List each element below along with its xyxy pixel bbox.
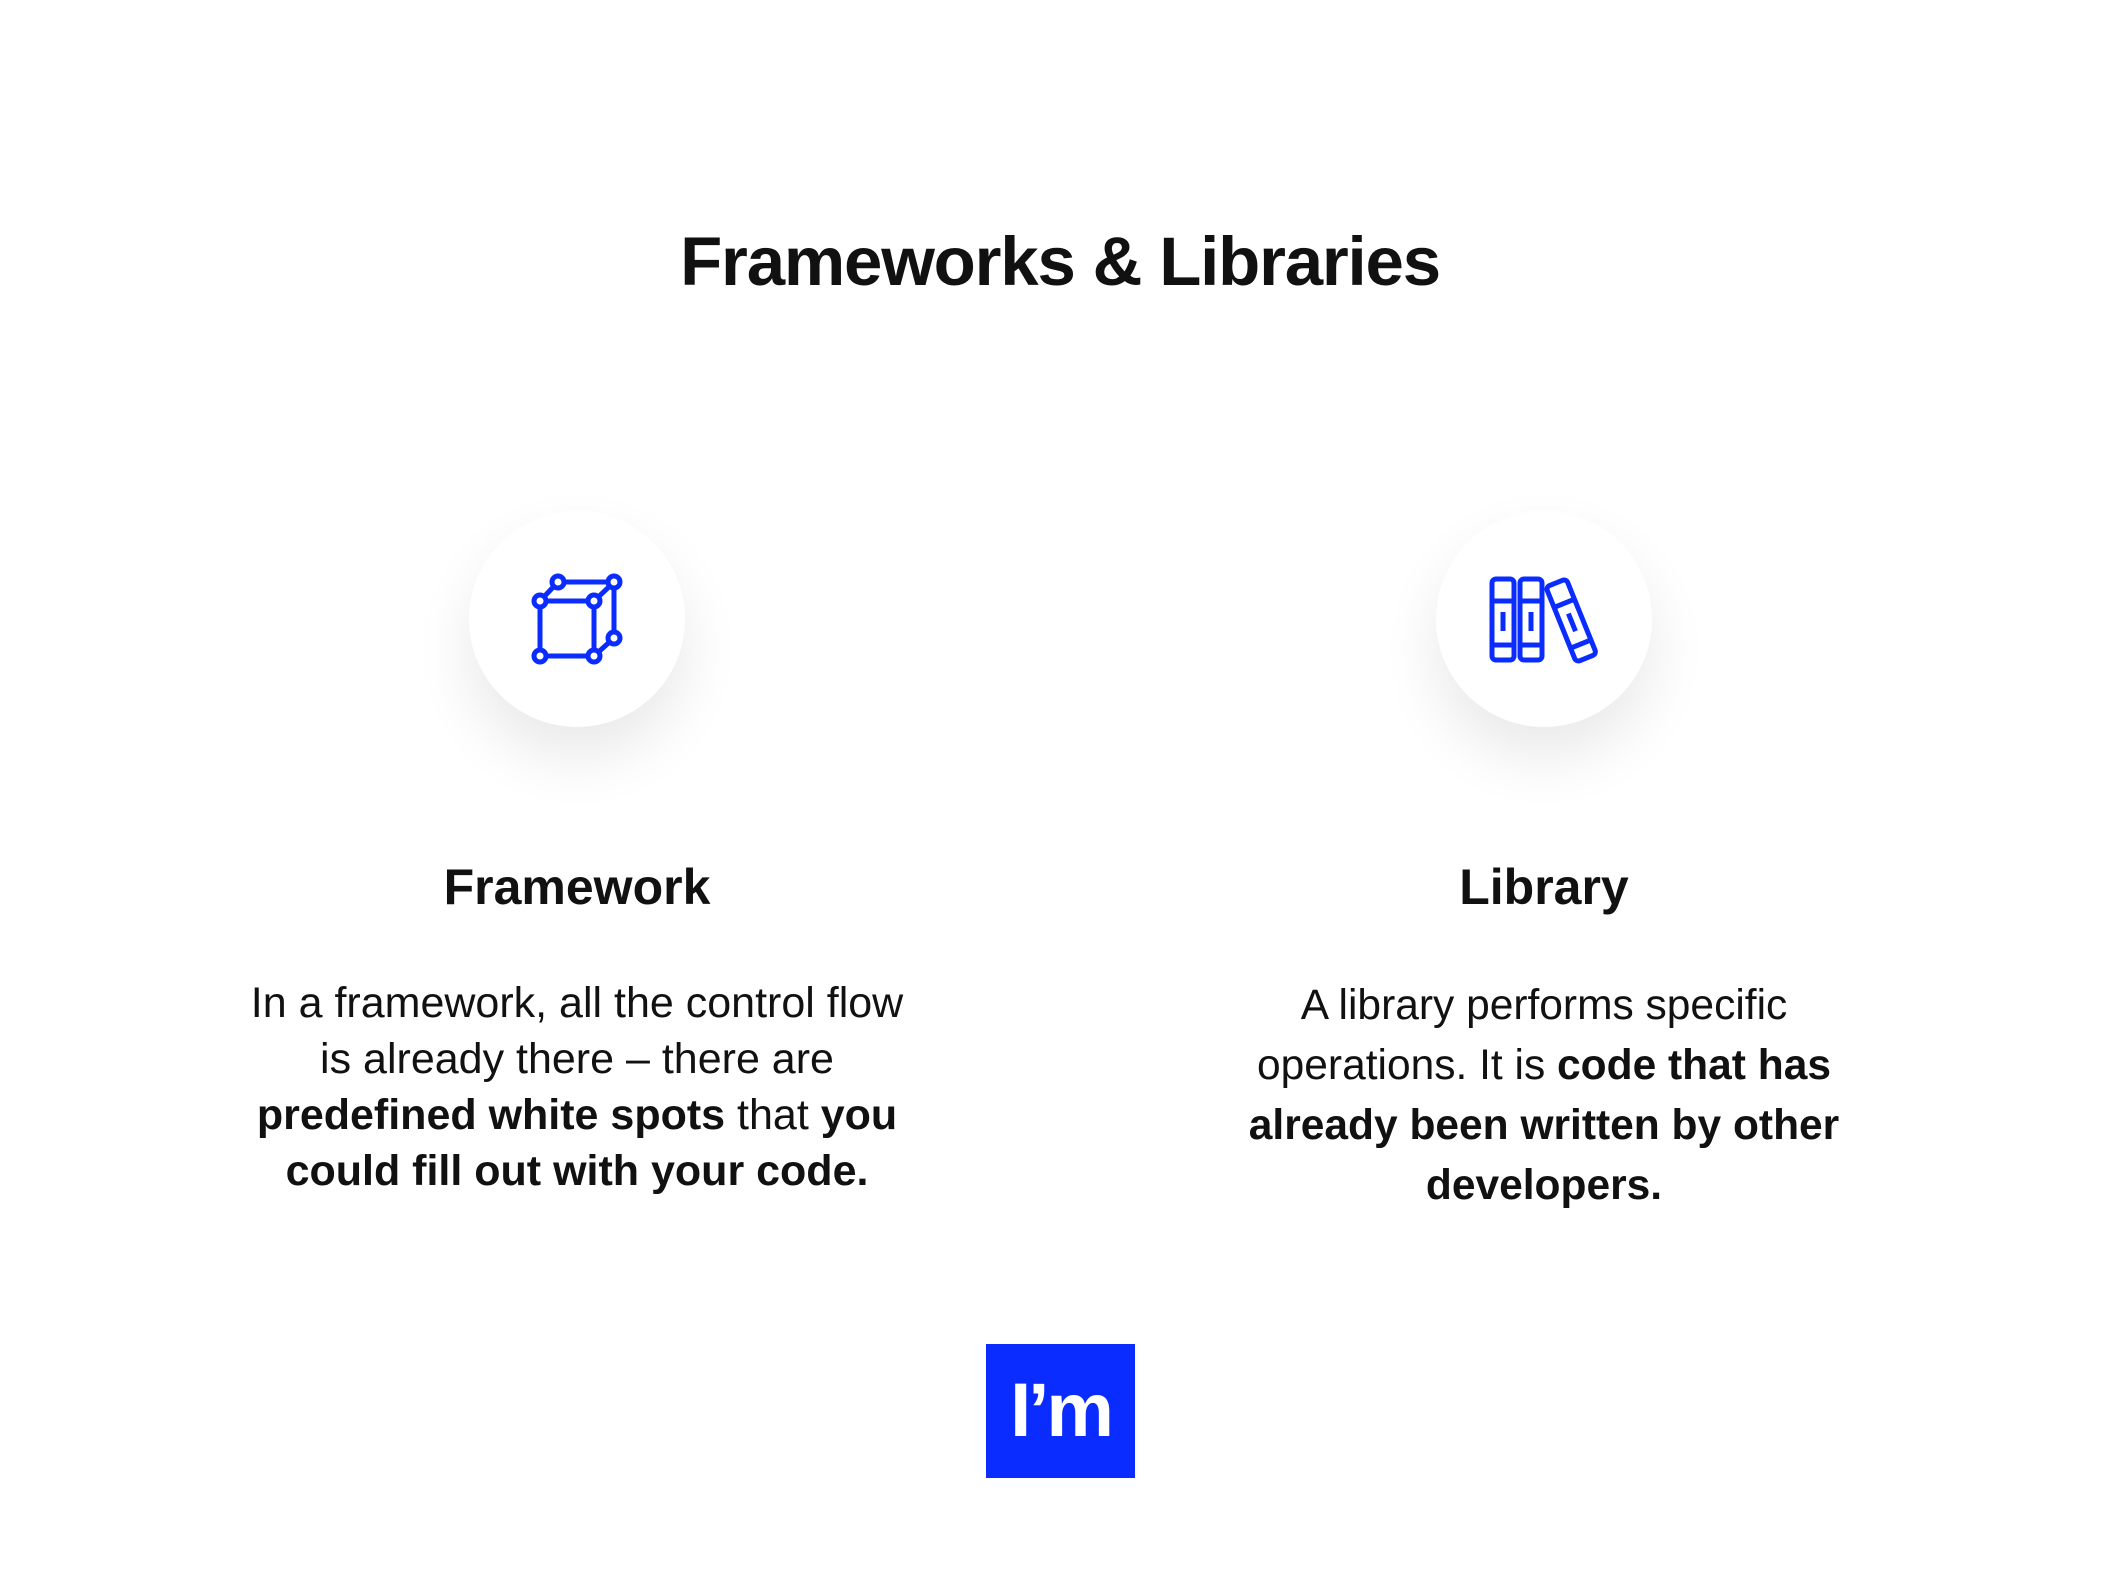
text: library description: developers. (1426, 1162, 1662, 1209)
logo: I'm (986, 1344, 1135, 1478)
icon: books (1436, 511, 1652, 727)
text: library description: operations. It is code that has (1257, 1042, 1831, 1089)
text: framework description: In a framework, all the control flow (251, 979, 903, 1027)
text: library description: A library performs specific (1301, 982, 1787, 1029)
icon: framework cube (469, 511, 685, 727)
title: Frameworks & Libraries (680, 223, 1440, 300)
heading: library: Library (1459, 859, 1629, 915)
text: framework description: could fill out with your code. (286, 1147, 868, 1195)
text: framework description: predefined white spots that you (257, 1091, 897, 1139)
text: library description (1249, 982, 1839, 1209)
logo: I'm: I’m (1010, 1368, 1111, 1453)
text: framework description (251, 979, 904, 1195)
panel: library (1249, 576, 1839, 1209)
text: library description: already been written by other (1249, 1102, 1839, 1149)
heading: framework: Framework (444, 859, 710, 915)
text: framework description: is already there – there are (320, 1035, 834, 1083)
panel: framework (251, 574, 904, 1195)
